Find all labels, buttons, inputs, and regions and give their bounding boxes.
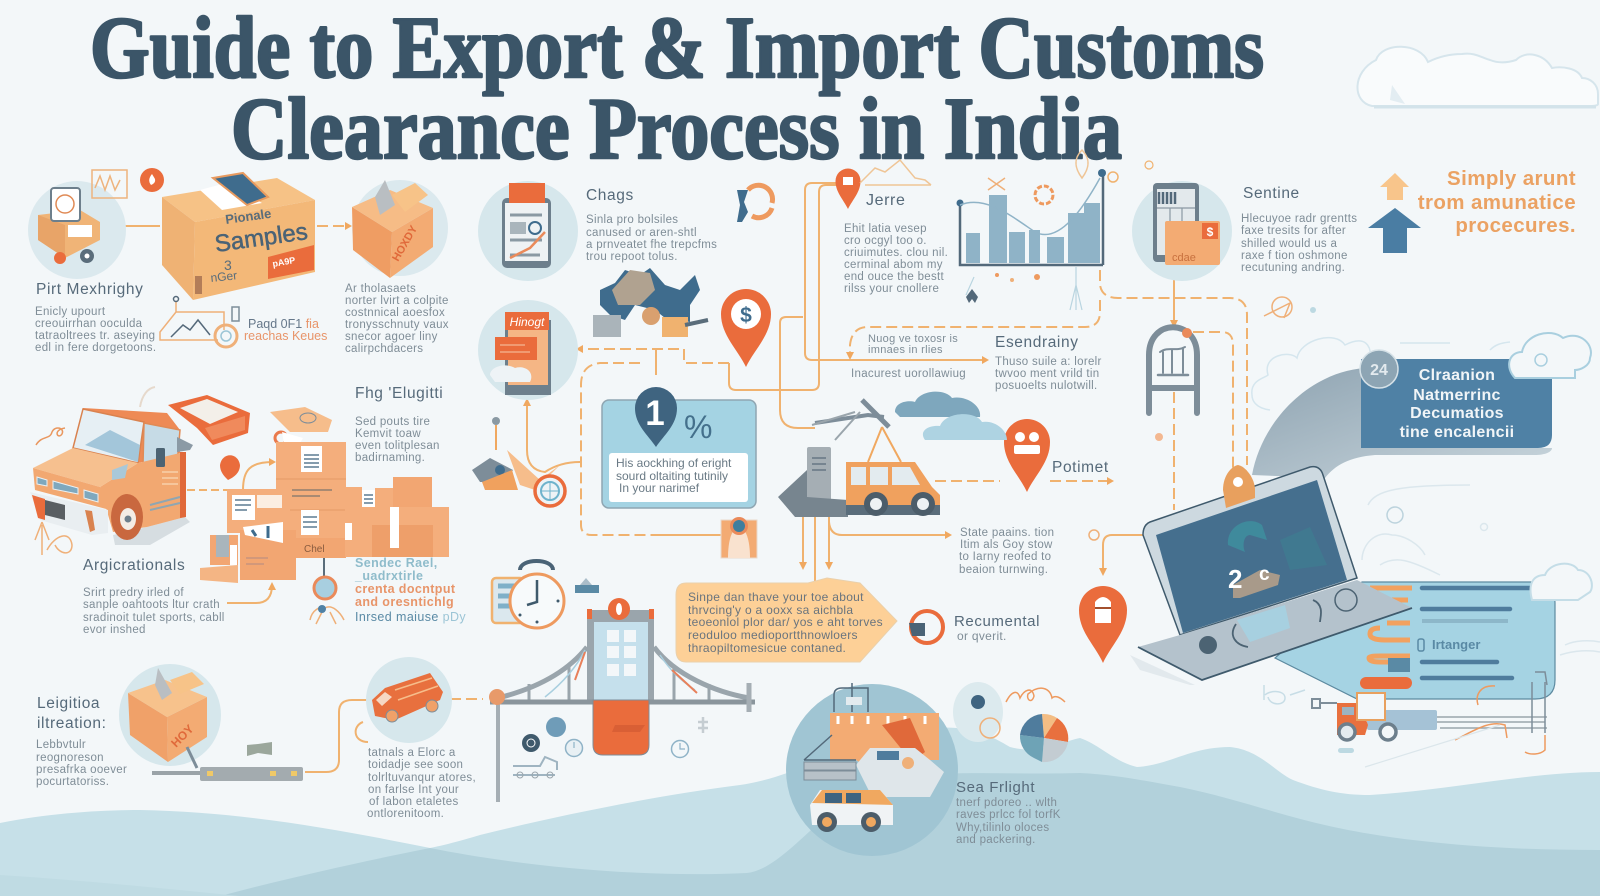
connector lines bbox=[110, 183, 1247, 772]
icon: refresh ring bbox=[909, 611, 943, 643]
text: orange headline bbox=[1418, 167, 1576, 237]
callout: orange note: teoeonlol plor dar/ yos e aht torves bbox=[688, 615, 883, 629]
text: Jerre bbox=[844, 192, 948, 295]
icon: world map bbox=[593, 268, 708, 337]
text: Fhg Elugitti: badirnaming. bbox=[355, 452, 425, 464]
icon: calculator in circle: cdae bbox=[1172, 252, 1196, 264]
text: Chags: Sinla pro bolsiles bbox=[586, 214, 678, 226]
icon: laptop in circle: Hinogt bbox=[510, 315, 545, 329]
text: Recumental bbox=[954, 613, 1040, 643]
callout: orange note: thraopiltomesicue contaned. bbox=[688, 641, 846, 655]
callout: orange note: Sinpe dan thave your toe about bbox=[688, 590, 864, 604]
text: Chags: trou repoot tolus. bbox=[586, 251, 678, 263]
text: Pirt Mexhrighy: Pirt Mexhrighy bbox=[36, 281, 143, 298]
icon: calculator in circle: $ bbox=[1207, 225, 1214, 239]
text: Sea Freight bbox=[956, 779, 1061, 846]
text: Sendec Rael colored note: and oresntichlg bbox=[355, 595, 454, 609]
text: Sendec Rael colored note: crenta docntput bbox=[355, 582, 456, 596]
icon: box and scanner bbox=[119, 664, 303, 781]
text: Sea Freight: and packering. bbox=[956, 834, 1036, 846]
callout: orange note: thrvcing'y o a ooxx sa aichbla bbox=[688, 603, 853, 617]
illustration: telescope and globe bbox=[472, 417, 565, 506]
illustration: sea freight circle bbox=[786, 683, 958, 856]
text: state note: Itim als Goy stow bbox=[960, 539, 1053, 551]
text: Sentine: shilled would us a bbox=[1241, 238, 1337, 250]
small globes and clocks bbox=[513, 717, 708, 778]
pin: Jerre marker bbox=[836, 160, 931, 209]
text: chart note bbox=[244, 317, 327, 343]
chart: pie bbox=[1020, 714, 1068, 762]
icon: van in circle bbox=[366, 657, 452, 743]
pin: number one: 1 bbox=[645, 394, 665, 433]
illustration: stacked cartons bbox=[200, 442, 449, 583]
icon: coin and squiggle bbox=[953, 682, 1065, 742]
text: Pirt Mexhrighy: Enicly upourt bbox=[35, 306, 106, 318]
pin: dollar: $ bbox=[740, 304, 752, 327]
text: Leigitioa: presafrka ooever bbox=[36, 764, 127, 776]
text: van note: ontlorenitoom. bbox=[367, 808, 444, 820]
text: Argicrationals: sradinoit tulet sports, cabll bbox=[83, 612, 225, 624]
panel: percent card: In your narimef bbox=[619, 481, 700, 495]
text: Leigitioa: reognoreson bbox=[36, 752, 104, 764]
cloud: banner corner bbox=[1509, 333, 1591, 378]
text: Esendrainy: twvoo ment vrild tin bbox=[995, 368, 1099, 380]
title: Clearance Process in India bbox=[231, 81, 1122, 178]
text: Sentine: recutuning andring. bbox=[1241, 262, 1345, 274]
illustration: orange truck bbox=[30, 387, 193, 555]
pin: number one bbox=[635, 387, 677, 447]
text: Sea Freight: Sea Frlight bbox=[956, 779, 1035, 796]
small decorative icons bbox=[1089, 297, 1316, 540]
illustration: stacked cartons: Chel bbox=[304, 544, 325, 555]
text: Chags: canused or aren-shtl bbox=[586, 227, 697, 239]
text: chart note: reachas Keues bbox=[244, 329, 327, 343]
text: Potimet: Potimet bbox=[1052, 459, 1109, 476]
illustration: small truck and gantry bbox=[1264, 672, 1547, 767]
text: state note: beaion turnwing. bbox=[959, 564, 1048, 576]
icon: samples shipping box: pA9P bbox=[272, 255, 296, 269]
text: chart note: Paqd 0F1 fia bbox=[248, 317, 319, 331]
text: orange headline: procecures. bbox=[1455, 214, 1576, 237]
text: Sendec Rael colored note bbox=[354, 556, 466, 624]
pin: face bbox=[1004, 419, 1050, 492]
text: Argicrationals: Srirt predry irled of bbox=[83, 587, 184, 599]
text: box note bbox=[345, 283, 449, 355]
text: Jerre: cerminal abom my bbox=[844, 259, 943, 271]
text: Jerre: criuimutes. clou nil. bbox=[844, 247, 948, 259]
text: Sea Freight: Why,tilinlo oloces bbox=[956, 822, 1049, 834]
text: Leigitioa: Lebbvtulr bbox=[36, 739, 86, 751]
icon: samples shipping box: Samples bbox=[213, 218, 309, 258]
badge: 24 bbox=[1360, 350, 1398, 388]
icon: clock and calendar bbox=[492, 561, 599, 628]
text: Leigitioa bbox=[36, 695, 127, 788]
panel: percent card bbox=[602, 387, 756, 508]
badge: 24: 24 bbox=[1370, 362, 1388, 379]
faint outlines right bbox=[1362, 485, 1600, 655]
text: box note: calirpchdacers bbox=[345, 343, 423, 355]
illustration: laptop bbox=[1130, 467, 1412, 685]
text: Recumental: Recumental bbox=[954, 613, 1040, 630]
text: orange headline: trom amunatice bbox=[1418, 191, 1576, 214]
panel: blue banner: Natmerrinc bbox=[1413, 387, 1501, 404]
callout: orange note bbox=[676, 578, 897, 662]
text: Leigitioa: Leigitioa bbox=[37, 695, 100, 712]
text: Sentine bbox=[1241, 185, 1357, 274]
text: Pirt Mexhrighy: creouirrhan ooculda bbox=[35, 318, 143, 330]
text: Jerre: Jerre bbox=[866, 192, 905, 209]
panel: percent card: sourd oltaiting tutinily bbox=[616, 469, 728, 483]
icon: orange tag bbox=[1223, 465, 1255, 508]
text: Sentine: raxe f tion oshmone bbox=[1241, 250, 1348, 262]
text: van note: tatnals a Elorc a bbox=[368, 747, 456, 759]
pin: dollar bbox=[721, 289, 771, 367]
text: Pirt Mexhrighy: tatraoltrees tr. aseying bbox=[35, 330, 155, 342]
text: Esendrainy: posuoelts nulotwill. bbox=[995, 380, 1098, 392]
text: van note: toidadje see soon bbox=[368, 759, 463, 771]
text: Pirt Mexhrighy bbox=[35, 281, 156, 354]
text: orange headline: Simply arunt bbox=[1447, 167, 1576, 190]
panel: blue document: Irtanger bbox=[1432, 637, 1480, 652]
text: Argicrationals: sanple oahtoots ltur crath bbox=[83, 599, 220, 611]
text: box note: tronysschnuty vaux bbox=[345, 319, 449, 331]
text: Fhg Elugitti bbox=[355, 385, 443, 464]
text: Esendrainy: Esendrainy bbox=[995, 334, 1079, 351]
icon: chart with gear bbox=[160, 296, 239, 347]
text: Fhg Elugitti: even tolitplesan bbox=[355, 440, 440, 452]
panel: blue document bbox=[1275, 582, 1555, 699]
text: box note: snecor agoer liny bbox=[345, 331, 438, 343]
text: box note: costnnical aoesfox bbox=[345, 307, 445, 319]
icon: arch gate bbox=[1149, 327, 1197, 413]
text: small note: Inacurest uorollawiug bbox=[851, 368, 966, 380]
illustration: package on truck bbox=[168, 395, 332, 480]
illustration: laptop: c bbox=[1259, 564, 1270, 585]
text: Jerre: rilss your cnollere bbox=[844, 283, 939, 295]
text: Pirt Mexhrighy: edl in fere dorgetoons. bbox=[35, 342, 156, 354]
clouds: left of banner bbox=[1252, 338, 1510, 410]
icon: box in circle: HOXDY bbox=[390, 223, 420, 264]
text: small note: imnaes in rlies bbox=[868, 344, 943, 356]
text: state note: State paains. tion bbox=[960, 527, 1054, 539]
text: Fhg Elugitti: Sed pouts tire bbox=[355, 416, 430, 428]
icon: globe with hands bbox=[310, 558, 344, 624]
text: Argicrationals: evor inshed bbox=[83, 624, 146, 636]
text: Argicrationals: Argicrationals bbox=[83, 557, 185, 574]
illustration: customs bridge bbox=[489, 598, 755, 802]
icon: rotating arrows bbox=[737, 185, 773, 222]
text: Chags bbox=[586, 187, 717, 263]
text: box note: norter lvirt a colpite bbox=[345, 295, 449, 307]
illustration: crane and van bbox=[778, 400, 940, 517]
chart: city skyline bbox=[956, 150, 1153, 310]
text: Sentine: Hlecuyoe radr grentts bbox=[1241, 213, 1357, 225]
text: small note: Nuog ve toxosr is bbox=[868, 333, 958, 345]
title bbox=[90, 0, 1264, 178]
icon: box in circle bbox=[352, 180, 448, 278]
title: Guide to Export & Import Customs bbox=[90, 0, 1264, 97]
icon: samples shipping box: nGer bbox=[210, 268, 238, 285]
icon: tablet in circle bbox=[478, 181, 578, 281]
text: Fhg Elugitti: Kemvit toaw bbox=[355, 428, 421, 440]
text: Jerre: end ouce the bestt bbox=[844, 271, 945, 283]
background waves bbox=[0, 727, 1600, 896]
text: Chags: Chags bbox=[586, 187, 634, 204]
text: Esendrainy bbox=[995, 334, 1102, 392]
text: state note: to Iarny reofed to bbox=[959, 551, 1051, 563]
text: Sea Freight: raves prlcc fol torfK bbox=[956, 809, 1061, 821]
text: Jerre: cro ocgyl too o. bbox=[844, 235, 927, 247]
pin: gate marker bbox=[1079, 586, 1127, 663]
text: small note bbox=[851, 333, 966, 380]
icon: box and scanner: HOY bbox=[168, 722, 197, 750]
arc behind banner bbox=[1252, 368, 1552, 478]
text: Fhg Elugitti: Fhg 'Elugitti bbox=[355, 385, 443, 402]
text: van note bbox=[367, 747, 476, 820]
text: Sendec Rael colored note: Sendec Rael, bbox=[355, 556, 438, 570]
text: Leigitioa: iltreation: bbox=[37, 715, 106, 732]
text: Recumental: or qverit. bbox=[957, 629, 1007, 643]
icon: forklift in circle bbox=[28, 168, 164, 279]
panel: percent card: His aockhing of eright bbox=[616, 456, 732, 470]
text: Sentine: Sentine bbox=[1243, 185, 1300, 202]
text: state note bbox=[959, 527, 1054, 576]
icon: calculator in circle bbox=[1132, 181, 1232, 281]
panel: blue banner: Decumatios bbox=[1410, 405, 1504, 422]
text: Jerre: Ehit latia vesep bbox=[844, 223, 927, 235]
text: van note: on farlse Int your bbox=[368, 784, 459, 796]
icon: location device bbox=[721, 517, 757, 558]
icon: up arrows bbox=[1368, 173, 1421, 253]
panel: blue banner: tine encalencii bbox=[1400, 424, 1514, 441]
text: Argicrationals bbox=[83, 557, 225, 636]
text: van note: tolrltuvanqur atores, bbox=[368, 772, 476, 784]
panel: blue banner: Clraanion bbox=[1419, 367, 1495, 384]
text: Chags: a prnveatet fhe trepcfms bbox=[586, 239, 717, 251]
text: Sendec Rael colored note: Inrsed maiuse pDy bbox=[355, 610, 466, 624]
clouds: crane bbox=[895, 392, 1007, 440]
callout: orange note: reoduloo medioportthnowloers bbox=[688, 628, 858, 642]
text: Sea Freight: tnerf pdoreo .. wlth bbox=[956, 797, 1057, 809]
text: Leigitioa: pocurtatoriss. bbox=[36, 776, 109, 788]
panel: blue banner bbox=[1360, 350, 1552, 448]
text: Esendrainy: Thuso suile a: lorelr bbox=[995, 356, 1102, 368]
icon: laptop in circle bbox=[478, 300, 578, 400]
text: box note: Ar tholasaets bbox=[345, 283, 416, 295]
text: Sentine: faxe tresits for after bbox=[1241, 225, 1346, 237]
icon: samples shipping box: Pionale bbox=[224, 206, 272, 227]
icon: samples shipping box bbox=[162, 173, 315, 300]
cloud: top right bbox=[1357, 47, 1598, 107]
cloud: document corner bbox=[1531, 564, 1592, 600]
text: Sendec Rael colored note: _uadrxtirle bbox=[354, 569, 423, 583]
illustration: laptop: 2 bbox=[1228, 564, 1242, 594]
text: van note: of labon etaletes bbox=[369, 796, 458, 808]
panel: percent card: % bbox=[684, 409, 712, 445]
icon: samples shipping box: 3 bbox=[224, 257, 232, 273]
